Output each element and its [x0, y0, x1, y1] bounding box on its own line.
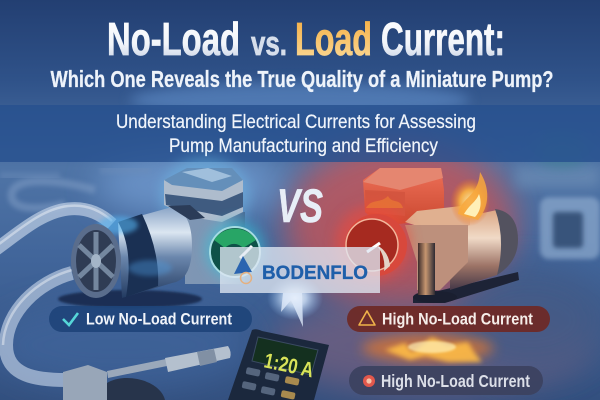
- pill: high no-load current, lower: [349, 366, 543, 395]
- pill: low no-load current: [49, 306, 252, 332]
- pump head: [363, 168, 470, 290]
- ground flames: [362, 334, 494, 362]
- red gauge: [335, 205, 411, 281]
- icon: check: [63, 313, 78, 325]
- VS: VS: [277, 179, 323, 232]
- title: Current:: [381, 13, 505, 65]
- title: No-Load: [107, 13, 240, 65]
- cylinder: [418, 243, 435, 295]
- title: [107, 13, 505, 65]
- left pump: [58, 157, 265, 308]
- logo box: [220, 247, 380, 293]
- micrometer: [63, 346, 231, 400]
- motor body: [98, 205, 205, 298]
- icon: red bulb: [363, 375, 375, 387]
- translucent subtitle band: [0, 105, 600, 162]
- motor body: [450, 209, 518, 290]
- logo box: BODENFLO: [262, 263, 368, 284]
- pill: low no-load current: Low No-Load Current: [86, 310, 232, 328]
- subtitle: Pump Manufacturing and Efficiency: [169, 136, 438, 157]
- reading: 1:20 A: [262, 349, 316, 382]
- pill: high no-load current: [347, 306, 550, 332]
- fan face: [71, 224, 121, 298]
- subtitle: Understanding Electrical Currents for Assessing: [116, 112, 476, 133]
- title: vs.: [251, 25, 287, 63]
- green gauge: [205, 220, 265, 280]
- right pump: [335, 168, 519, 303]
- icon: warning triangle: [359, 311, 375, 325]
- spark under logo: [267, 276, 323, 327]
- pill: high no-load current: High No-Load Current: [382, 310, 533, 328]
- top flames: [366, 172, 490, 226]
- icon: logo mark: [234, 256, 252, 284]
- pill: high no-load current, lower: High No-Load Current: [381, 371, 530, 391]
- multimeter: [228, 329, 329, 400]
- pump head: [164, 168, 245, 284]
- title: Load: [295, 13, 372, 65]
- subtitle: [116, 112, 476, 157]
- tube: [0, 206, 112, 380]
